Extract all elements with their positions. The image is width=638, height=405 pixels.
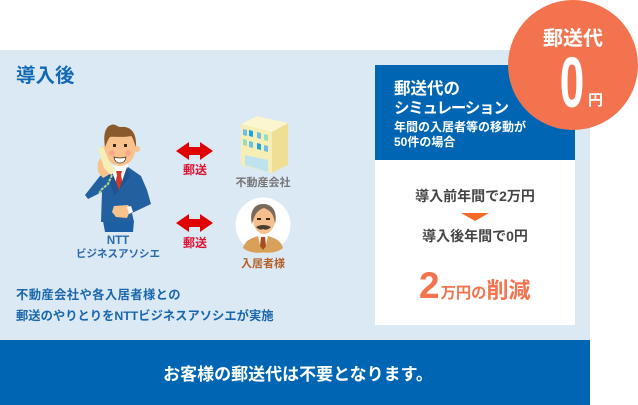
footer banner: [0, 340, 590, 405]
icon: real estate building: [241, 116, 288, 173]
badge: postage zero yen: [508, 0, 638, 130]
arrow: lower two-way post: [176, 214, 213, 232]
badge: postage zero yen: 郵送代: [543, 27, 603, 50]
text block: description: 郵送のやりとりをNTTビジネスアソシエが実施: [16, 308, 274, 323]
label: resident: 入居者様: [241, 256, 285, 270]
heading: simulation: 郵送代の: [394, 79, 460, 98]
arrow: down triangle: [461, 213, 489, 221]
label: NTT business associe: ビジネスアソシエ: [76, 247, 160, 260]
text: simulation condition: 年間の入居者等の移動が: [394, 119, 526, 134]
text: simulation condition: 50件の場合: [394, 134, 455, 149]
label: NTT business associe: NTT: [107, 235, 129, 247]
label: lower post: 郵送: [183, 235, 207, 250]
icon: resident: [236, 198, 290, 253]
text: savings: 2万円の削減: [419, 265, 530, 306]
arrow: upper two-way post: [176, 142, 213, 160]
panel: simulation header: [375, 65, 575, 160]
footer banner: お客様の郵送代は不要となります。: [163, 364, 433, 384]
label: real estate company: 不動産会社: [236, 175, 290, 189]
heading: after introduction: 導入後: [16, 64, 75, 87]
label: upper post: 郵送: [183, 162, 207, 177]
panel: simulation result: [375, 160, 575, 325]
icon: NTT business associe operator: [85, 124, 151, 232]
badge: postage zero yen: 0: [560, 43, 584, 123]
text block: description: 不動産会社や各入居者様との: [16, 287, 181, 302]
heading: simulation: シミュレーション: [394, 100, 508, 117]
text: before introduction: 導入前年間で2万円: [415, 188, 535, 204]
text: after introduction: 導入後年間で0円: [422, 228, 528, 244]
badge: postage zero yen: 円: [588, 92, 603, 109]
